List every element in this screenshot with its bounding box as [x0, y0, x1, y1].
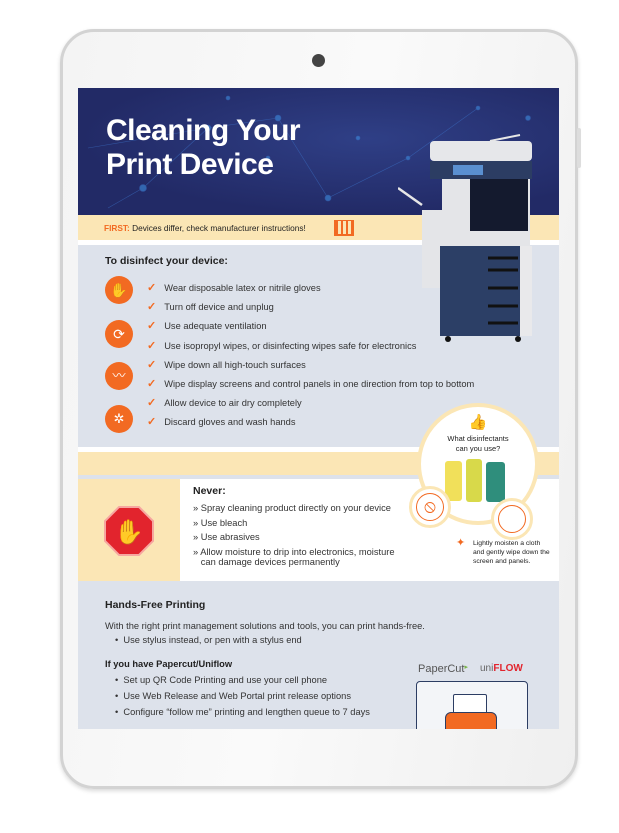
icon: printer card: [416, 681, 528, 741]
checklist: ✓ Wipe display screens and control panels in one direction from top to bottom: [147, 378, 474, 390]
panel: never: can damage devices permanently: [201, 557, 340, 567]
panel: hands-free printing: Hands-Free Printing: [105, 599, 205, 611]
icon: camera: [312, 54, 325, 67]
title: Print Device: [106, 148, 273, 181]
icons: steps: 〰: [112, 368, 126, 383]
panel: hands-free printing: • Use stylus instead, or pen with a stylus end: [115, 635, 302, 645]
screen: [78, 88, 559, 729]
panel: never: » Use abrasives: [193, 532, 260, 542]
title: [106, 114, 300, 181]
first notice band: [78, 215, 559, 240]
icon: wipe: [491, 498, 533, 540]
panel: never: [78, 479, 559, 581]
panel: never: » Allow moisture to drip into electronics, moisture: [193, 547, 395, 557]
panel: never: Never:: [193, 485, 226, 497]
icon: stop hand: [104, 506, 154, 556]
panel: hands-free printing: • Use Web Release and Web Portal print release options: [115, 691, 351, 701]
logos: PaperCut▸: [418, 663, 468, 675]
panel: hands-free printing: If you have Papercut/Uniflow: [105, 659, 232, 669]
checklist: ✓ Use isopropyl wipes, or disinfecting wipes safe for electronics: [147, 340, 416, 352]
checklist: ✓ Wipe down all high-touch surfaces: [147, 359, 306, 371]
illustration: printer: [398, 134, 532, 342]
side buttons: [577, 128, 581, 168]
icons: steps: ⟳: [113, 326, 125, 342]
title: Cleaning Your: [106, 114, 300, 147]
icon: stop hand: ✋: [114, 518, 144, 546]
panel: never: » Spray cleaning product directly on your device: [193, 503, 391, 513]
panel: hands-free printing: With the right print management solutions and tools, you can print hands-free.: [105, 621, 425, 631]
callout: disinfectants: can you use?: [456, 444, 500, 453]
checklist: ✓ Use adequate ventilation: [147, 320, 267, 332]
checklist: [147, 282, 474, 428]
icon: no spray: ⦸: [424, 496, 436, 516]
checklist: ✓ Allow device to air dry completely: [147, 397, 302, 409]
callout: disinfectants: What disinfectants: [447, 434, 509, 443]
panel: hands-free printing: [78, 586, 559, 729]
callout: disinfectants: 👍: [469, 414, 487, 431]
panel: never: » Use bleach: [193, 518, 247, 528]
checklist: ✓ Wear disposable latex or nitrile gloves: [147, 282, 321, 294]
panel: hands-free printing: • Configure “follow me” printing and lengthen queue to 7 days: [115, 707, 370, 717]
icons: steps: ✲: [114, 411, 124, 426]
checklist: ✓ Discard gloves and wash hands: [147, 416, 295, 428]
header banner: [78, 88, 559, 215]
panel: hands-free printing: uniFLOW: [480, 663, 523, 674]
note: lightly moisten: Lightly moisten a cloth and gently wipe down the screen and panels.: [473, 540, 550, 565]
panel: hands-free printing: • Set up QR Code Printing and use your cell phone: [115, 675, 327, 685]
note: lightly moisten: ✦: [456, 537, 465, 549]
icons: steps: ✋: [110, 282, 128, 298]
heading: to disinfect: To disinfect your device:: [105, 255, 228, 267]
icons: steps: [105, 276, 133, 433]
icon: manual: [334, 220, 354, 236]
divider band: [78, 447, 559, 452]
icon: no spray: [409, 486, 451, 528]
tablet frame: [60, 29, 578, 789]
first notice band: FIRST: Devices differ, check manufacturer instructions!: [104, 223, 306, 233]
checklist: ✓ Turn off device and unplug: [147, 301, 274, 313]
callout: disinfectants: [417, 403, 539, 525]
